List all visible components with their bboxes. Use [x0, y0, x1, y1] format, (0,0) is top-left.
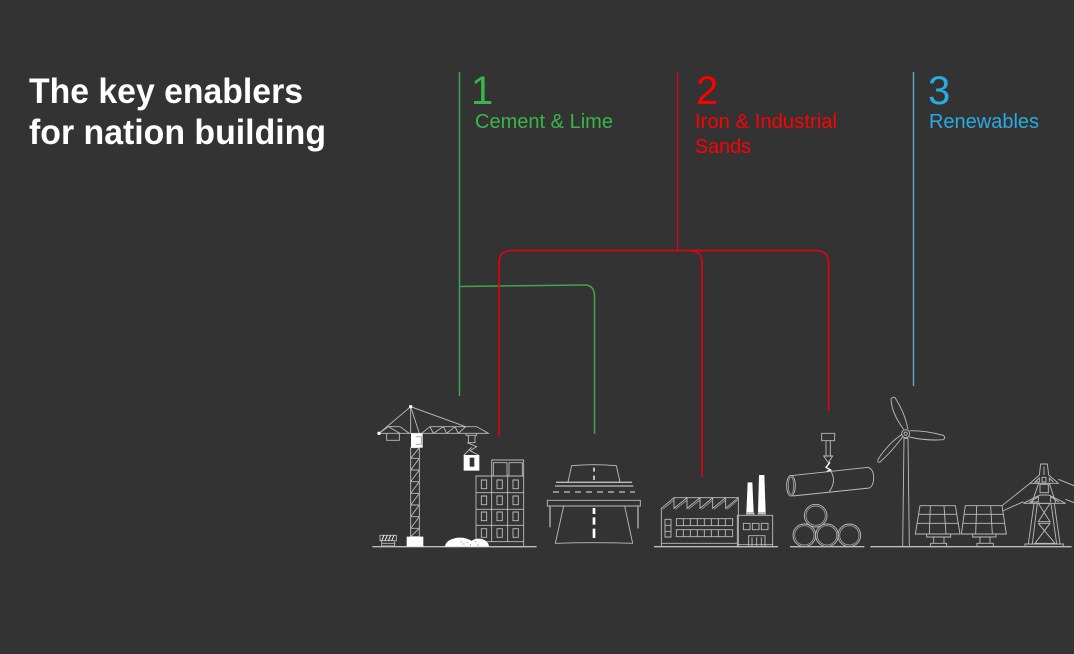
title: for nation building [29, 113, 326, 152]
title: The key enablers [29, 72, 303, 111]
column 1 heading: Cement & Lime: Cement & Lime [475, 111, 613, 133]
icon: wind turbine, solar panels and pylon [870, 397, 1074, 547]
red connector lines [499, 72, 828, 477]
wind turbine [878, 397, 945, 547]
title [29, 72, 326, 152]
icon: pipes and hoist [787, 433, 874, 547]
column 3 heading: Renewables: Renewables [929, 111, 1039, 133]
icon: construction crane and building [372, 405, 537, 547]
column 1 heading: Cement & Lime: 1 [471, 69, 493, 113]
building [476, 460, 524, 547]
blue connector line [912, 72, 914, 386]
column 2 heading: Iron & Industrial Sands: 2 [696, 69, 718, 113]
barrier [380, 535, 396, 546]
column 2 heading: Iron & Industrial Sands: Sands [695, 136, 751, 158]
sand piles [445, 538, 489, 547]
column 3 heading: Renewables: 3 [928, 69, 950, 113]
transmission tower [1002, 464, 1074, 547]
column 2 heading: Iron & Industrial Sands [695, 69, 837, 158]
column 3 heading: Renewables [928, 69, 1039, 133]
icon: factory [654, 475, 778, 547]
green connector lines [460, 72, 594, 434]
column 1 heading: Cement & Lime [471, 69, 613, 133]
solar panels [915, 506, 1006, 547]
crane [377, 405, 488, 547]
ground line [372, 545, 537, 549]
column 2 heading: Iron & Industrial Sands: Iron & Industrial [695, 111, 837, 133]
icon: highway overpass [547, 465, 640, 543]
